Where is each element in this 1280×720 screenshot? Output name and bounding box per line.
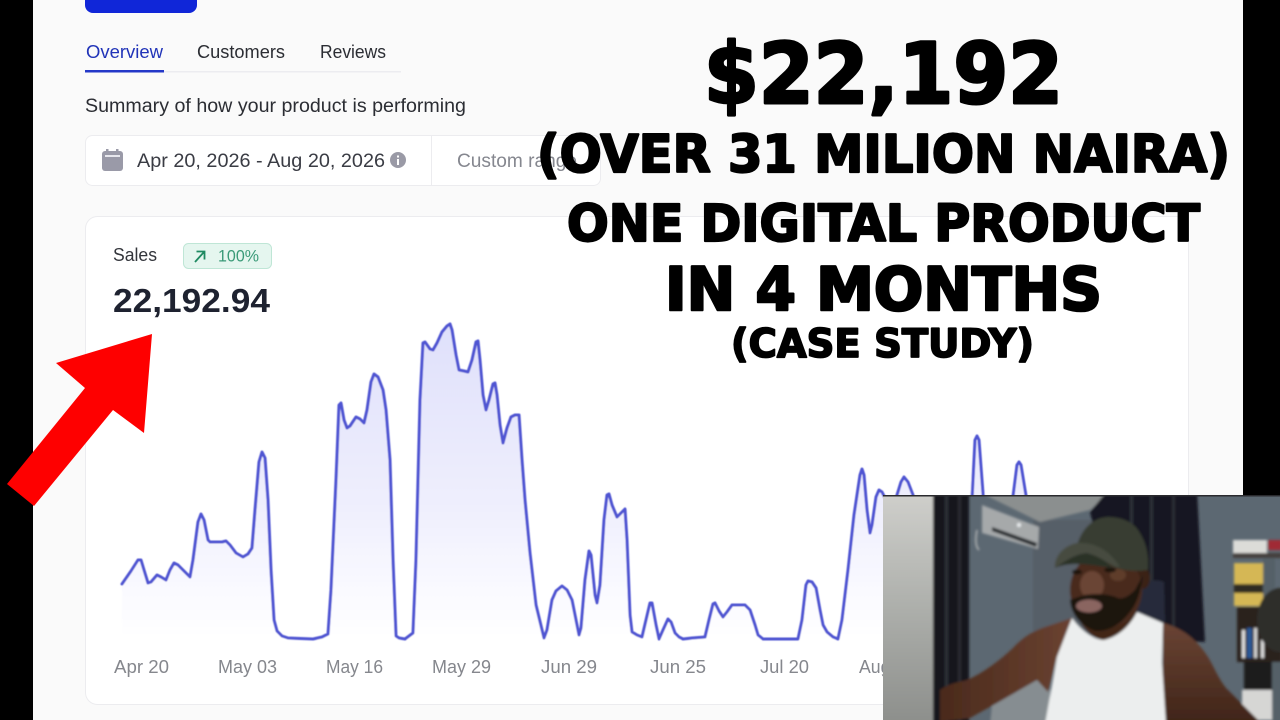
left light panel — [880, 490, 934, 720]
arrow: red arrow pointing at sales total — [7, 334, 152, 506]
publish button — [85, 0, 197, 13]
tab bar — [85, 41, 401, 72]
presenter lips — [1076, 600, 1102, 612]
icon: calendar — [102, 149, 123, 171]
webcam photo: presenter in room — [880, 490, 1280, 720]
presenter left arm — [940, 618, 1072, 720]
right curtain — [1090, 490, 1205, 642]
air conditioner — [976, 505, 1039, 550]
chart x axis labels: Aug 20 — [859, 656, 915, 677]
date range selector: Custom range — [457, 151, 577, 172]
heading: in 4 months: IN 4 MONTHS — [665, 255, 1102, 325]
tab bar: Overview — [86, 41, 164, 62]
heading: case study: (CASE STUDY) — [731, 322, 1034, 367]
chair headrest — [1133, 580, 1165, 622]
date range selector: Apr 20, 2026 - Aug 20, 2026 — [137, 151, 385, 172]
presenter right arm — [1162, 623, 1262, 720]
sales total: 22,192.94 — [113, 282, 271, 319]
presenter face — [1069, 562, 1143, 627]
presenter neck — [1081, 611, 1135, 640]
bookshelf — [1233, 540, 1280, 720]
left curtain — [933, 490, 969, 720]
chart x axis labels: Jul 20 — [760, 656, 809, 677]
photo top edge — [883, 495, 1280, 496]
presenter eyes — [1072, 570, 1082, 574]
title: revenue amount: $22,192 — [704, 25, 1063, 123]
heading: one digital product: ONE DIGITAL PRODUCT — [567, 195, 1200, 254]
chair lower — [990, 678, 1050, 720]
ceiling — [986, 496, 1106, 523]
panel: sales card — [86, 216, 1188, 704]
chart x axis labels: May 16 — [326, 656, 383, 677]
line chart: sales over time — [122, 324, 1040, 640]
heading: naira amount: (OVER 31 MILION NAIRA) — [537, 125, 1230, 185]
icon: info — [390, 152, 406, 168]
tab bar: Reviews — [320, 41, 386, 62]
chart x axis labels: May 03 — [218, 656, 277, 677]
chart x axis labels: Jun 29 — [541, 656, 597, 677]
presenter ear — [1138, 570, 1151, 590]
chart x axis labels — [114, 656, 915, 677]
presenter cap — [1055, 517, 1148, 571]
presenter beard — [1070, 575, 1143, 631]
tab bar: Customers — [197, 41, 285, 62]
trend badge — [184, 244, 272, 268]
presenter eye right — [1104, 568, 1116, 572]
trend badge: 100% — [218, 246, 259, 266]
chart x axis labels: Apr 20 — [114, 656, 169, 677]
sales label: Sales — [113, 244, 157, 265]
chart x axis labels: Jun 25 — [650, 656, 706, 677]
back wall section — [1034, 519, 1092, 636]
summary text: Summary of how your product is performing — [85, 96, 466, 117]
date range selector — [86, 136, 600, 186]
chart x axis labels: May 29 — [432, 656, 491, 677]
presenter tank top — [1045, 612, 1166, 720]
